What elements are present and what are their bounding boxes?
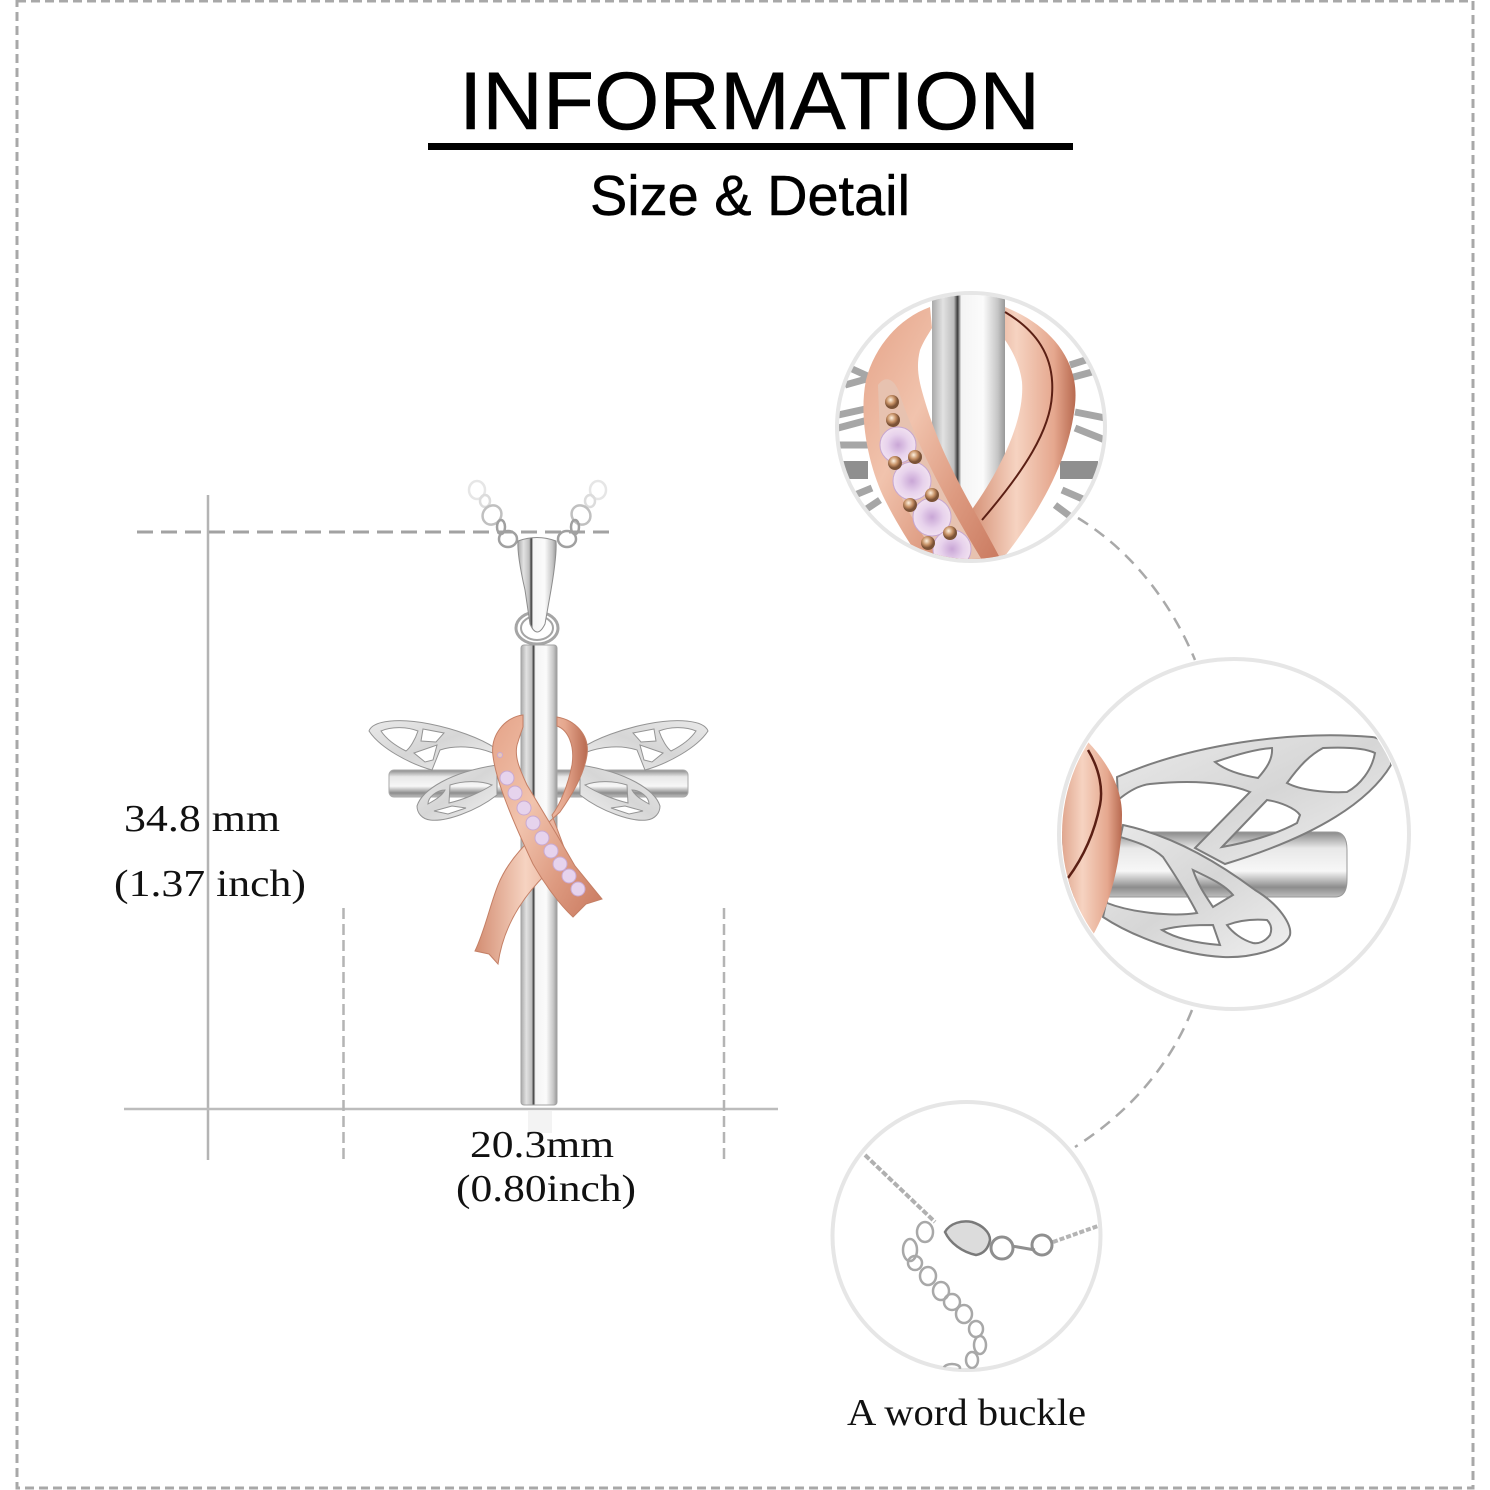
connector: second to third circle — [1075, 1010, 1192, 1147]
clasp caption: A word buckle — [847, 1392, 1086, 1434]
subtitle: Size & Detail — [590, 164, 910, 228]
title underline — [428, 143, 1073, 150]
height label: 34.8 mm — [124, 798, 280, 840]
silver bar — [1062, 832, 1347, 897]
extension chain — [903, 1222, 986, 1372]
pink stones — [880, 427, 971, 568]
silver bar — [932, 293, 1005, 563]
right rose strand — [968, 307, 1076, 562]
ribbon front band — [493, 715, 602, 917]
height label: (1.37 inch) — [114, 863, 306, 905]
lower wing — [1103, 825, 1290, 957]
lobster clasp — [945, 1221, 990, 1255]
height label — [114, 798, 306, 905]
jump ring — [516, 612, 558, 644]
width label — [456, 1124, 636, 1210]
left rose band — [863, 307, 1000, 565]
pendant necklace — [369, 481, 708, 1105]
pendant bail — [518, 538, 556, 632]
horizontal cross bar — [389, 770, 688, 797]
connector: first to second circle — [1078, 518, 1195, 660]
left wings — [369, 721, 497, 820]
metal beads — [885, 395, 957, 550]
detail circle: dragonfly wing — [1050, 659, 1409, 1009]
connector rings — [991, 1235, 1052, 1259]
upper chain — [865, 1155, 935, 1222]
bar reflection — [528, 1111, 552, 1133]
detail circle: ribbon stones — [837, 293, 1105, 568]
ribbon pink stones — [498, 752, 585, 896]
right wings — [580, 721, 708, 820]
silver wing spokes — [838, 358, 1105, 520]
upper wing — [1117, 735, 1391, 864]
title: INFORMATION — [459, 56, 1040, 147]
ribbon back strand — [475, 717, 587, 964]
right chain — [1053, 1226, 1098, 1242]
vertical cross bar — [521, 645, 557, 1105]
width label: (0.80inch) — [456, 1168, 636, 1210]
dimension lines — [124, 495, 778, 1160]
width label: 20.3mm — [470, 1124, 614, 1166]
stone channel — [878, 379, 985, 565]
necklace chain — [469, 481, 606, 547]
rose ribbon edge — [1062, 742, 1122, 934]
detail circle: clasp — [832, 1102, 1100, 1372]
